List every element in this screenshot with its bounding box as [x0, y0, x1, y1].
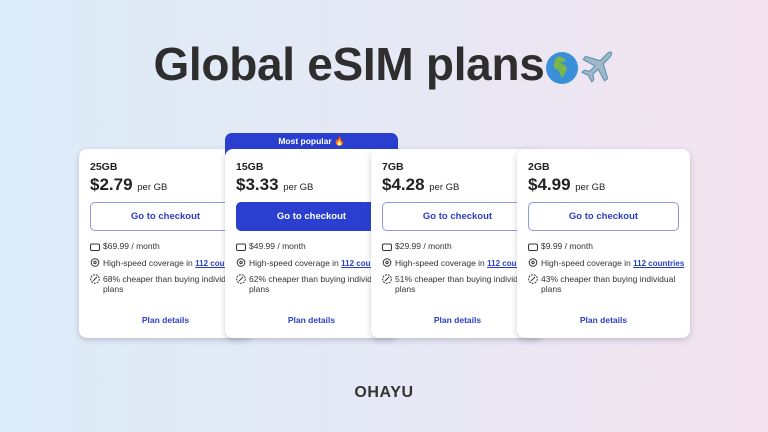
card: 7GB: $29.99 / month [395, 241, 452, 251]
card: 15GB: 15GB [236, 161, 263, 173]
logo: OHAYU [354, 384, 414, 401]
card: 7GB: plans [395, 284, 415, 294]
card: 15GB: 62% cheaper than buying individual [249, 274, 383, 284]
title: Global eSIM plans [153, 38, 545, 90]
card: 15GB: High-speed coverage in 112 countries [249, 258, 392, 268]
card: 2GB: 43% cheaper than buying individual [541, 274, 675, 284]
card: 2GB: 2GB [528, 161, 550, 173]
card: 2GB: $9.99 / month [541, 241, 593, 251]
card: 25GB: Plan details [142, 315, 189, 325]
card: 7GB: 51% cheaper than buying individual [395, 274, 529, 284]
most popular header: Most popular 🔥 [278, 136, 345, 146]
card: 25GB: plans [103, 284, 123, 294]
card: 2GB: Go to checkout [569, 211, 638, 222]
card: 15GB: Go to checkout [277, 211, 346, 222]
card: 2GB: plans [541, 284, 561, 294]
card: 25GB [79, 149, 252, 338]
card: 25GB: 68% cheaper than buying individual [103, 274, 237, 284]
card: 2GB: Plan details [580, 315, 627, 325]
card: 2GB [517, 149, 690, 338]
card: 2GB: $4.99 per GB [528, 175, 605, 194]
card: 15GB: $49.99 / month [249, 241, 306, 251]
card: 15GB: plans [249, 284, 269, 294]
card: 15GB: Plan details [288, 315, 335, 325]
card: 7GB: 7GB [382, 161, 404, 173]
card: 25GB: $69.99 / month [103, 241, 160, 251]
card: 15GB: $3.33 per GB [236, 175, 313, 194]
card: 7GB: $4.28 per GB [382, 175, 459, 194]
card: 7GB [371, 149, 544, 338]
card: 7GB: High-speed coverage in 112 countries [395, 258, 538, 268]
card: 25GB: 25GB [90, 161, 117, 173]
most popular header [225, 133, 398, 163]
card: 25GB: Go to checkout [131, 211, 200, 222]
card: 2GB: High-speed coverage in 112 countries [541, 258, 684, 268]
card: 25GB: $2.79 per GB [90, 175, 167, 194]
card: 7GB: Plan details [434, 315, 481, 325]
card: 25GB: High-speed coverage in 112 countries [103, 258, 246, 268]
card: 15GB [225, 149, 398, 338]
card: 7GB: Go to checkout [423, 211, 492, 222]
